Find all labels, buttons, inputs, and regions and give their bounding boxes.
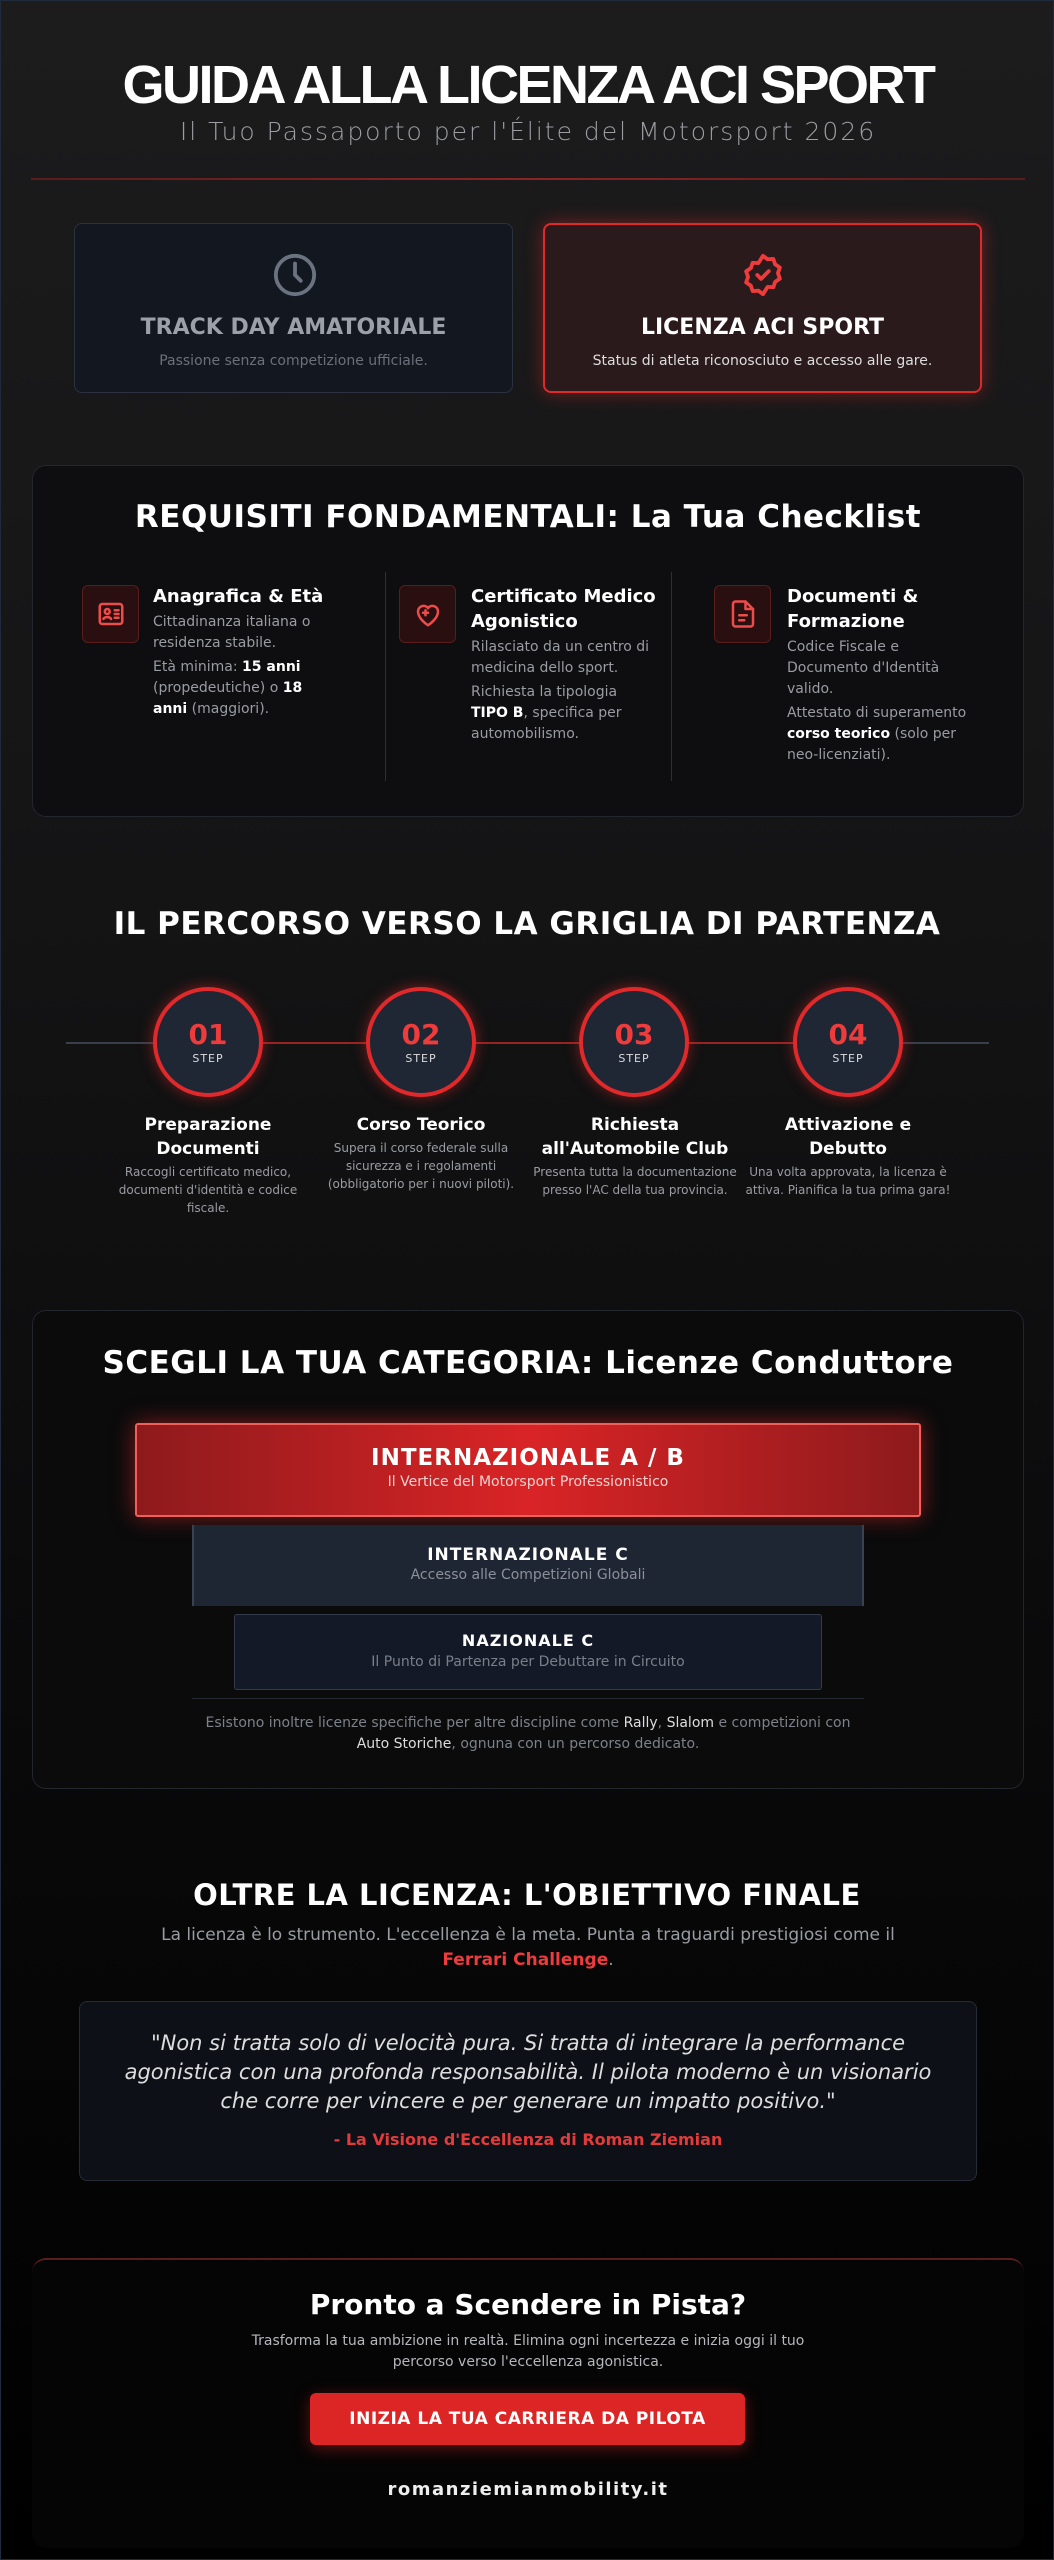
column: certificato: Rilasciato da un centro di medicina dello sport.: [471, 639, 649, 676]
column: documenti: Documenti & Formazione: [787, 586, 918, 632]
panel: CTA: Pronto a Scendere in Pista?: [310, 2288, 746, 2321]
card: track day: Passione senza competizione ufficiale.: [159, 353, 428, 369]
timeline: [66, 978, 989, 1215]
column: documenti: [787, 586, 966, 763]
panel: requisiti: [32, 465, 1024, 817]
quote box: [79, 2001, 977, 2181]
panel: CTA: Trasforma la tua ambizione in realtà. Elimina ogni incertezza e inizia oggi il tuo percorso verso l'eccellenza agonistica.: [252, 2333, 804, 2370]
intro text: La licenza è lo strumento. L'eccellenza è la meta. Punta a traguardi prestigiosi come il Ferrari Challenge.: [161, 1925, 895, 1970]
card: licenza: [543, 223, 982, 393]
title: GUIDA ALLA LICENZA ACI SPORT: [123, 55, 933, 115]
icon: clock: [274, 254, 316, 296]
step 4 text: [746, 1115, 950, 1197]
column: certificato: [471, 586, 656, 742]
quote box: - La Visione d'Eccellenza di Roman Ziemian: [334, 2130, 722, 2149]
tier: internazionale A/B: INTERNAZIONALE A / B: [371, 1445, 685, 1471]
step 1 text: Raccogli certificato medico, documenti d'identità e codice fiscale.: [119, 1165, 297, 1215]
step 2 text: Supera il corso federale sulla sicurezza e i regolamenti (obbligatorio per i nuovi piloti).: [328, 1141, 514, 1191]
column: anagrafica: Età minima: 15 anni (propedeutiche) o 18 anni (maggiori).: [153, 659, 302, 717]
quote box: "Non si tratta solo di velocità pura. Si tratta di integrare la performance agonistica con una profonda responsabilità. Il pilota moderno è un visionario che corre per vincere e per generare un impatto positivo.": [125, 2031, 931, 2113]
tier: internazionale C: [192, 1525, 864, 1606]
step 4 text: Attivazione e Debutto: [785, 1115, 911, 1159]
icon: document: [714, 585, 771, 643]
tier: internazionale A/B: Il Vertice del Motorsport Professionistico: [388, 1474, 668, 1490]
column: certificato: Richiesta la tipologia TIPO B, specifica per automobilismo.: [471, 684, 622, 742]
column: documenti: Attestato di superamento corso teorico (solo per neo-licenziati).: [787, 705, 966, 763]
step 3: [579, 987, 689, 1097]
heading: oltre: OLTRE LA LICENZA: L'OBIETTIVO FINALE: [193, 1878, 861, 1912]
panel: categorie: [32, 1310, 1024, 1789]
step 3: STEP: [618, 1052, 650, 1065]
card: track day: [74, 223, 513, 393]
tier: internazionale A/B: [135, 1423, 921, 1517]
step 1: [153, 987, 263, 1097]
step 4: [793, 987, 903, 1097]
step 2: 02: [402, 1018, 440, 1051]
tier: internazionale C: Accesso alle Competizioni Globali: [411, 1567, 645, 1583]
button: [310, 2393, 745, 2445]
step 3 text: Richiesta all'Automobile Club: [542, 1115, 728, 1159]
step 2 text: Corso Teorico: [357, 1115, 485, 1135]
step 1 text: Preparazione Documenti: [145, 1115, 271, 1159]
column: anagrafica: Anagrafica & Età: [153, 586, 323, 607]
step 4 text: Una volta approvata, la licenza è attiva. Pianifica la tua prima gara!: [746, 1165, 950, 1197]
step 4: 04: [829, 1018, 867, 1051]
step 2: STEP: [405, 1052, 437, 1065]
heading: SCEGLI LA TUA CATEGORIA: Licenze Conduttore: [103, 1345, 953, 1381]
step 3 text: Presenta tutta la documentazione presso l'AC della tua provincia.: [533, 1165, 737, 1197]
step 1 text: [119, 1115, 297, 1215]
step 1: STEP: [192, 1052, 224, 1065]
tier: nazionale C: NAZIONALE C: [462, 1631, 594, 1650]
step 4: STEP: [832, 1052, 864, 1065]
tier: nazionale C: Il Punto di Partenza per Debuttare in Circuito: [371, 1654, 685, 1670]
panel: CTA: [32, 2258, 1024, 2548]
heading: REQUISITI FONDAMENTALI: La Tua Checklist: [135, 499, 921, 535]
card: track day: TRACK DAY AMATORIALE: [141, 315, 446, 340]
tier: internazionale C: INTERNAZIONALE C: [427, 1545, 629, 1565]
column: anagrafica: Cittadinanza italiana o residenza stabile.: [153, 614, 310, 651]
step 2 text: [328, 1115, 514, 1191]
note: Esistono inoltre licenze specifiche per altre discipline come Rally, Slalom e competizioni con Auto Storiche, ognuna con un percorso dedicato.: [206, 1715, 850, 1752]
column: certificato: Certificato Medico Agonistico: [471, 586, 656, 632]
column: anagrafica: [153, 586, 323, 717]
column: documenti: Codice Fiscale e Documento d'Identità valido.: [787, 639, 939, 697]
step 1: 01: [189, 1018, 227, 1051]
card: licenza: Status di atleta riconosciuto e accesso alle gare.: [593, 353, 932, 369]
step 3 text: [533, 1115, 737, 1197]
step 3: 03: [615, 1018, 653, 1051]
tier: nazionale C: [234, 1614, 822, 1690]
icon: badge check: [744, 254, 782, 296]
subtitle: Il Tuo Passaporto per l'Élite del Motorsport 2026: [180, 117, 876, 146]
heading: percorso: IL PERCORSO VERSO LA GRIGLIA DI PARTENZA: [114, 906, 940, 942]
card: licenza: LICENZA ACI SPORT: [641, 315, 884, 340]
domain: romanziemianmobility.it: [387, 2479, 668, 2500]
button: INIZIA LA TUA CARRIERA DA PILOTA: [349, 2409, 706, 2429]
icon: id card: [82, 585, 139, 643]
icon: heart: [399, 585, 456, 643]
step 2: [366, 987, 476, 1097]
